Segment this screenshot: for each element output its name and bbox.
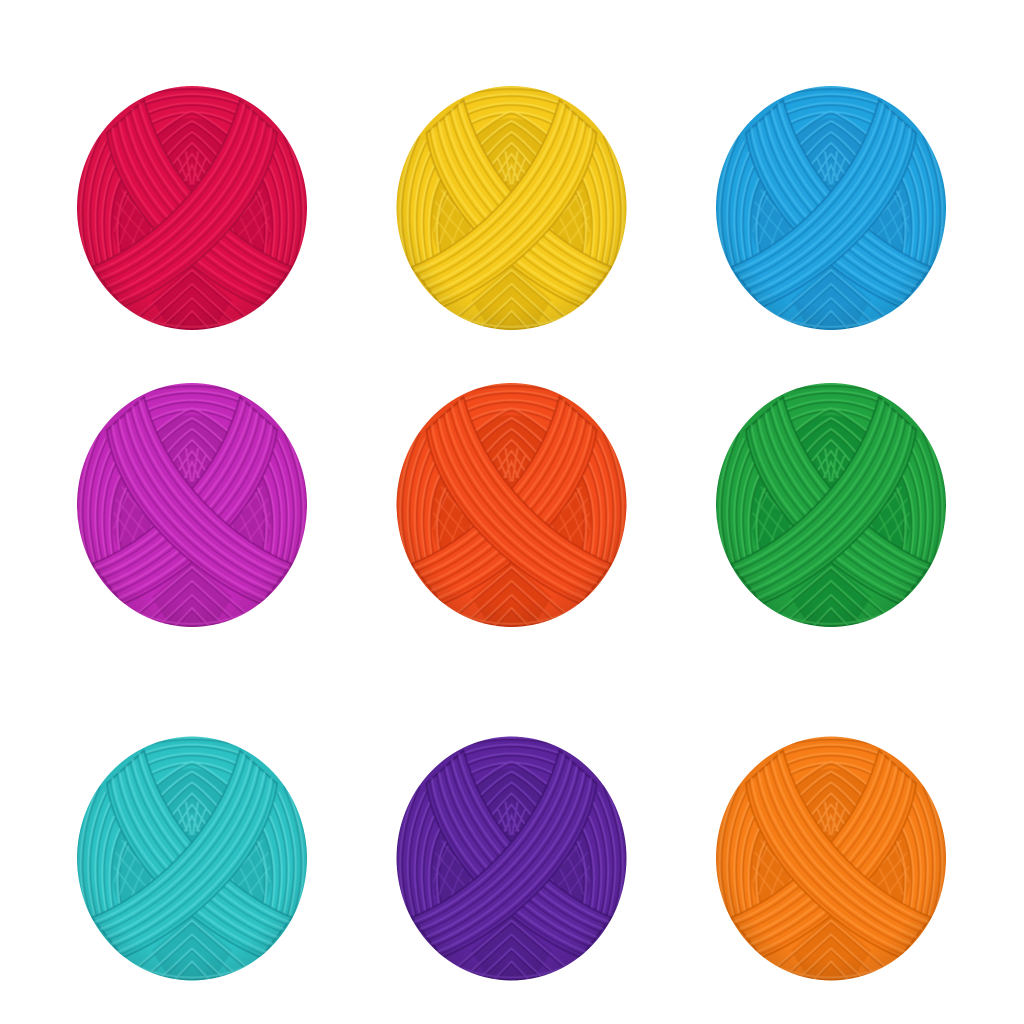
yarn ball: green <box>714 383 948 631</box>
yarn ball: teal <box>75 736 309 984</box>
yarn ball: purple <box>394 736 629 984</box>
yarn ball: crimson <box>75 86 309 334</box>
yarn ball: magenta <box>75 383 309 631</box>
yarn ball: yellow <box>394 86 629 334</box>
yarn ball: red-orange <box>394 383 629 631</box>
yarn ball: sky blue <box>714 86 948 334</box>
yarn ball: orange <box>714 736 948 984</box>
